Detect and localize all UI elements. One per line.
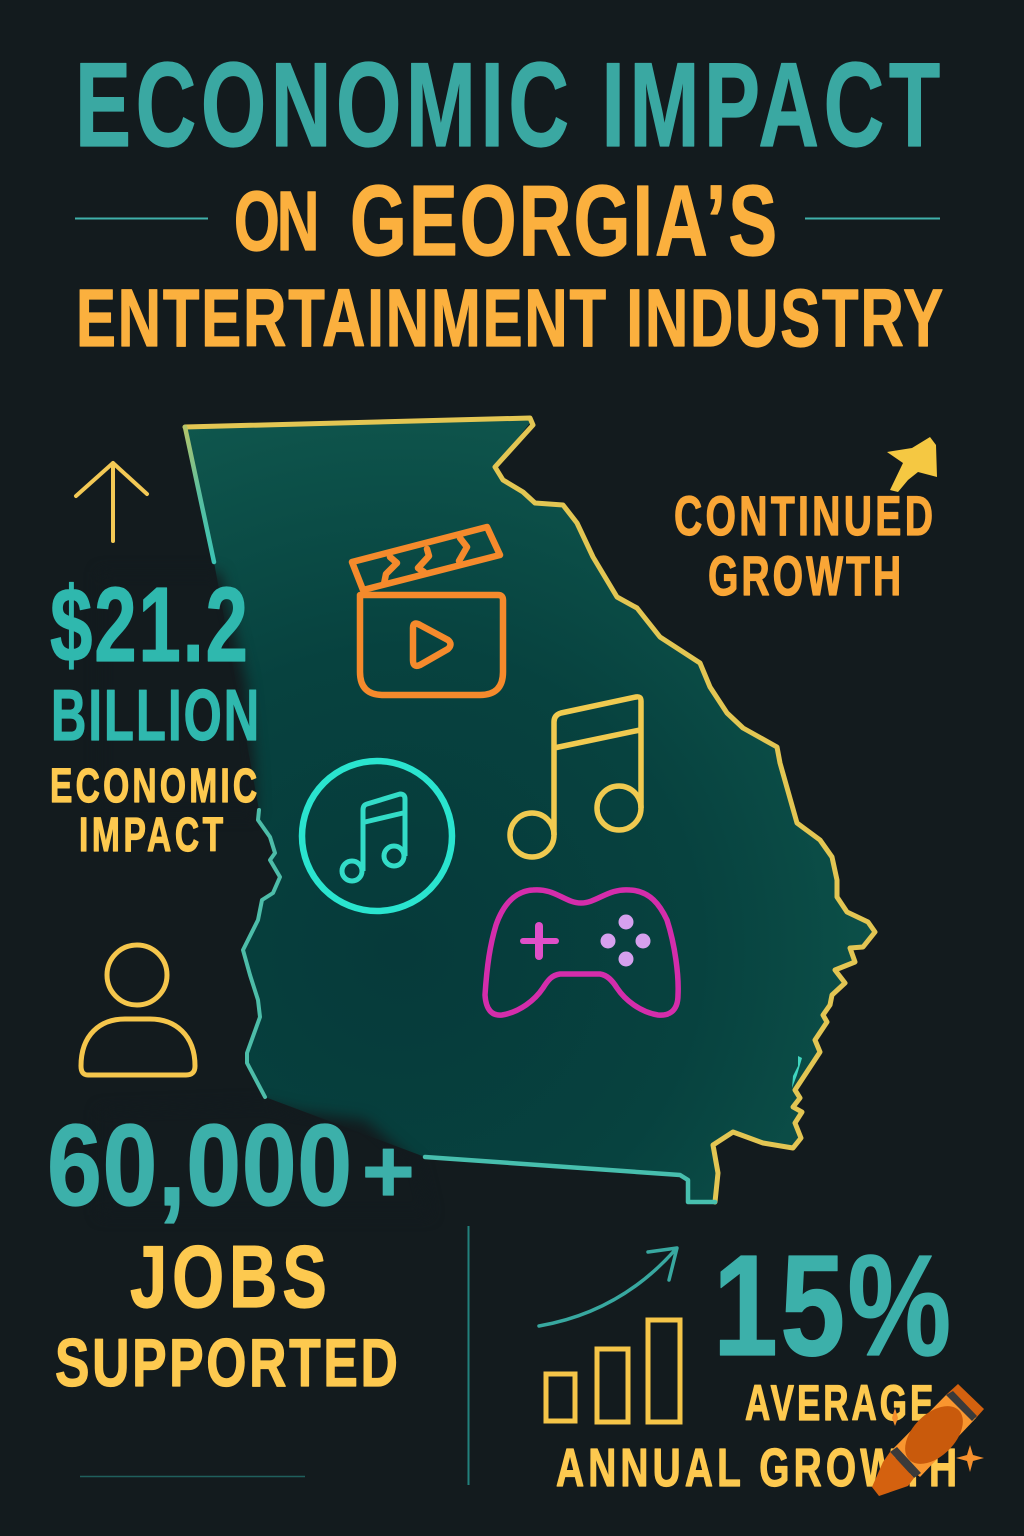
chart: rising bars bbox=[546, 1320, 680, 1422]
continued growth label: GROWTH bbox=[708, 545, 901, 608]
title bbox=[75, 37, 943, 364]
value: 60,000 bbox=[47, 1100, 352, 1230]
value: 15% bbox=[713, 1224, 951, 1386]
label line 1: ECONOMIC bbox=[50, 758, 257, 812]
icon: person bbox=[81, 945, 195, 1075]
continued growth label: CONTINUED bbox=[674, 485, 933, 548]
title line 3: ENTERTAINMENT INDUSTRY bbox=[76, 273, 943, 364]
unit: JOBS bbox=[130, 1227, 327, 1326]
continued growth arrow bbox=[887, 437, 937, 492]
economic impact stat bbox=[50, 565, 259, 861]
title line 2: Georgia's: GEORGIA’S bbox=[350, 165, 777, 277]
continued growth label bbox=[674, 485, 933, 608]
icon: film clapperboard bbox=[352, 527, 503, 695]
arrow: up bbox=[76, 463, 147, 541]
label line 2: IMPACT bbox=[79, 807, 223, 861]
label line 1: AVERAGE bbox=[745, 1376, 933, 1432]
unit: BILLION bbox=[51, 676, 259, 756]
icon: music note bbox=[510, 697, 641, 857]
arrow: growth trend bbox=[539, 1248, 677, 1326]
label line 2: ANNUAL GROWTH bbox=[556, 1437, 957, 1497]
label: SUPPORTED bbox=[55, 1324, 398, 1401]
growth stat bbox=[556, 1224, 957, 1497]
icon: game controller bbox=[485, 890, 678, 1015]
plus sign: + bbox=[362, 1122, 415, 1222]
title line 1: ECONOMIC IMPACT bbox=[75, 37, 940, 171]
icon: crayon bbox=[872, 1384, 984, 1496]
title line 2: on: ON bbox=[234, 175, 319, 269]
jobs stat bbox=[47, 1100, 415, 1401]
value: $21.2 bbox=[50, 565, 248, 684]
map of Georgia bbox=[100, 418, 875, 1215]
icon: music note in circle bbox=[302, 761, 452, 911]
